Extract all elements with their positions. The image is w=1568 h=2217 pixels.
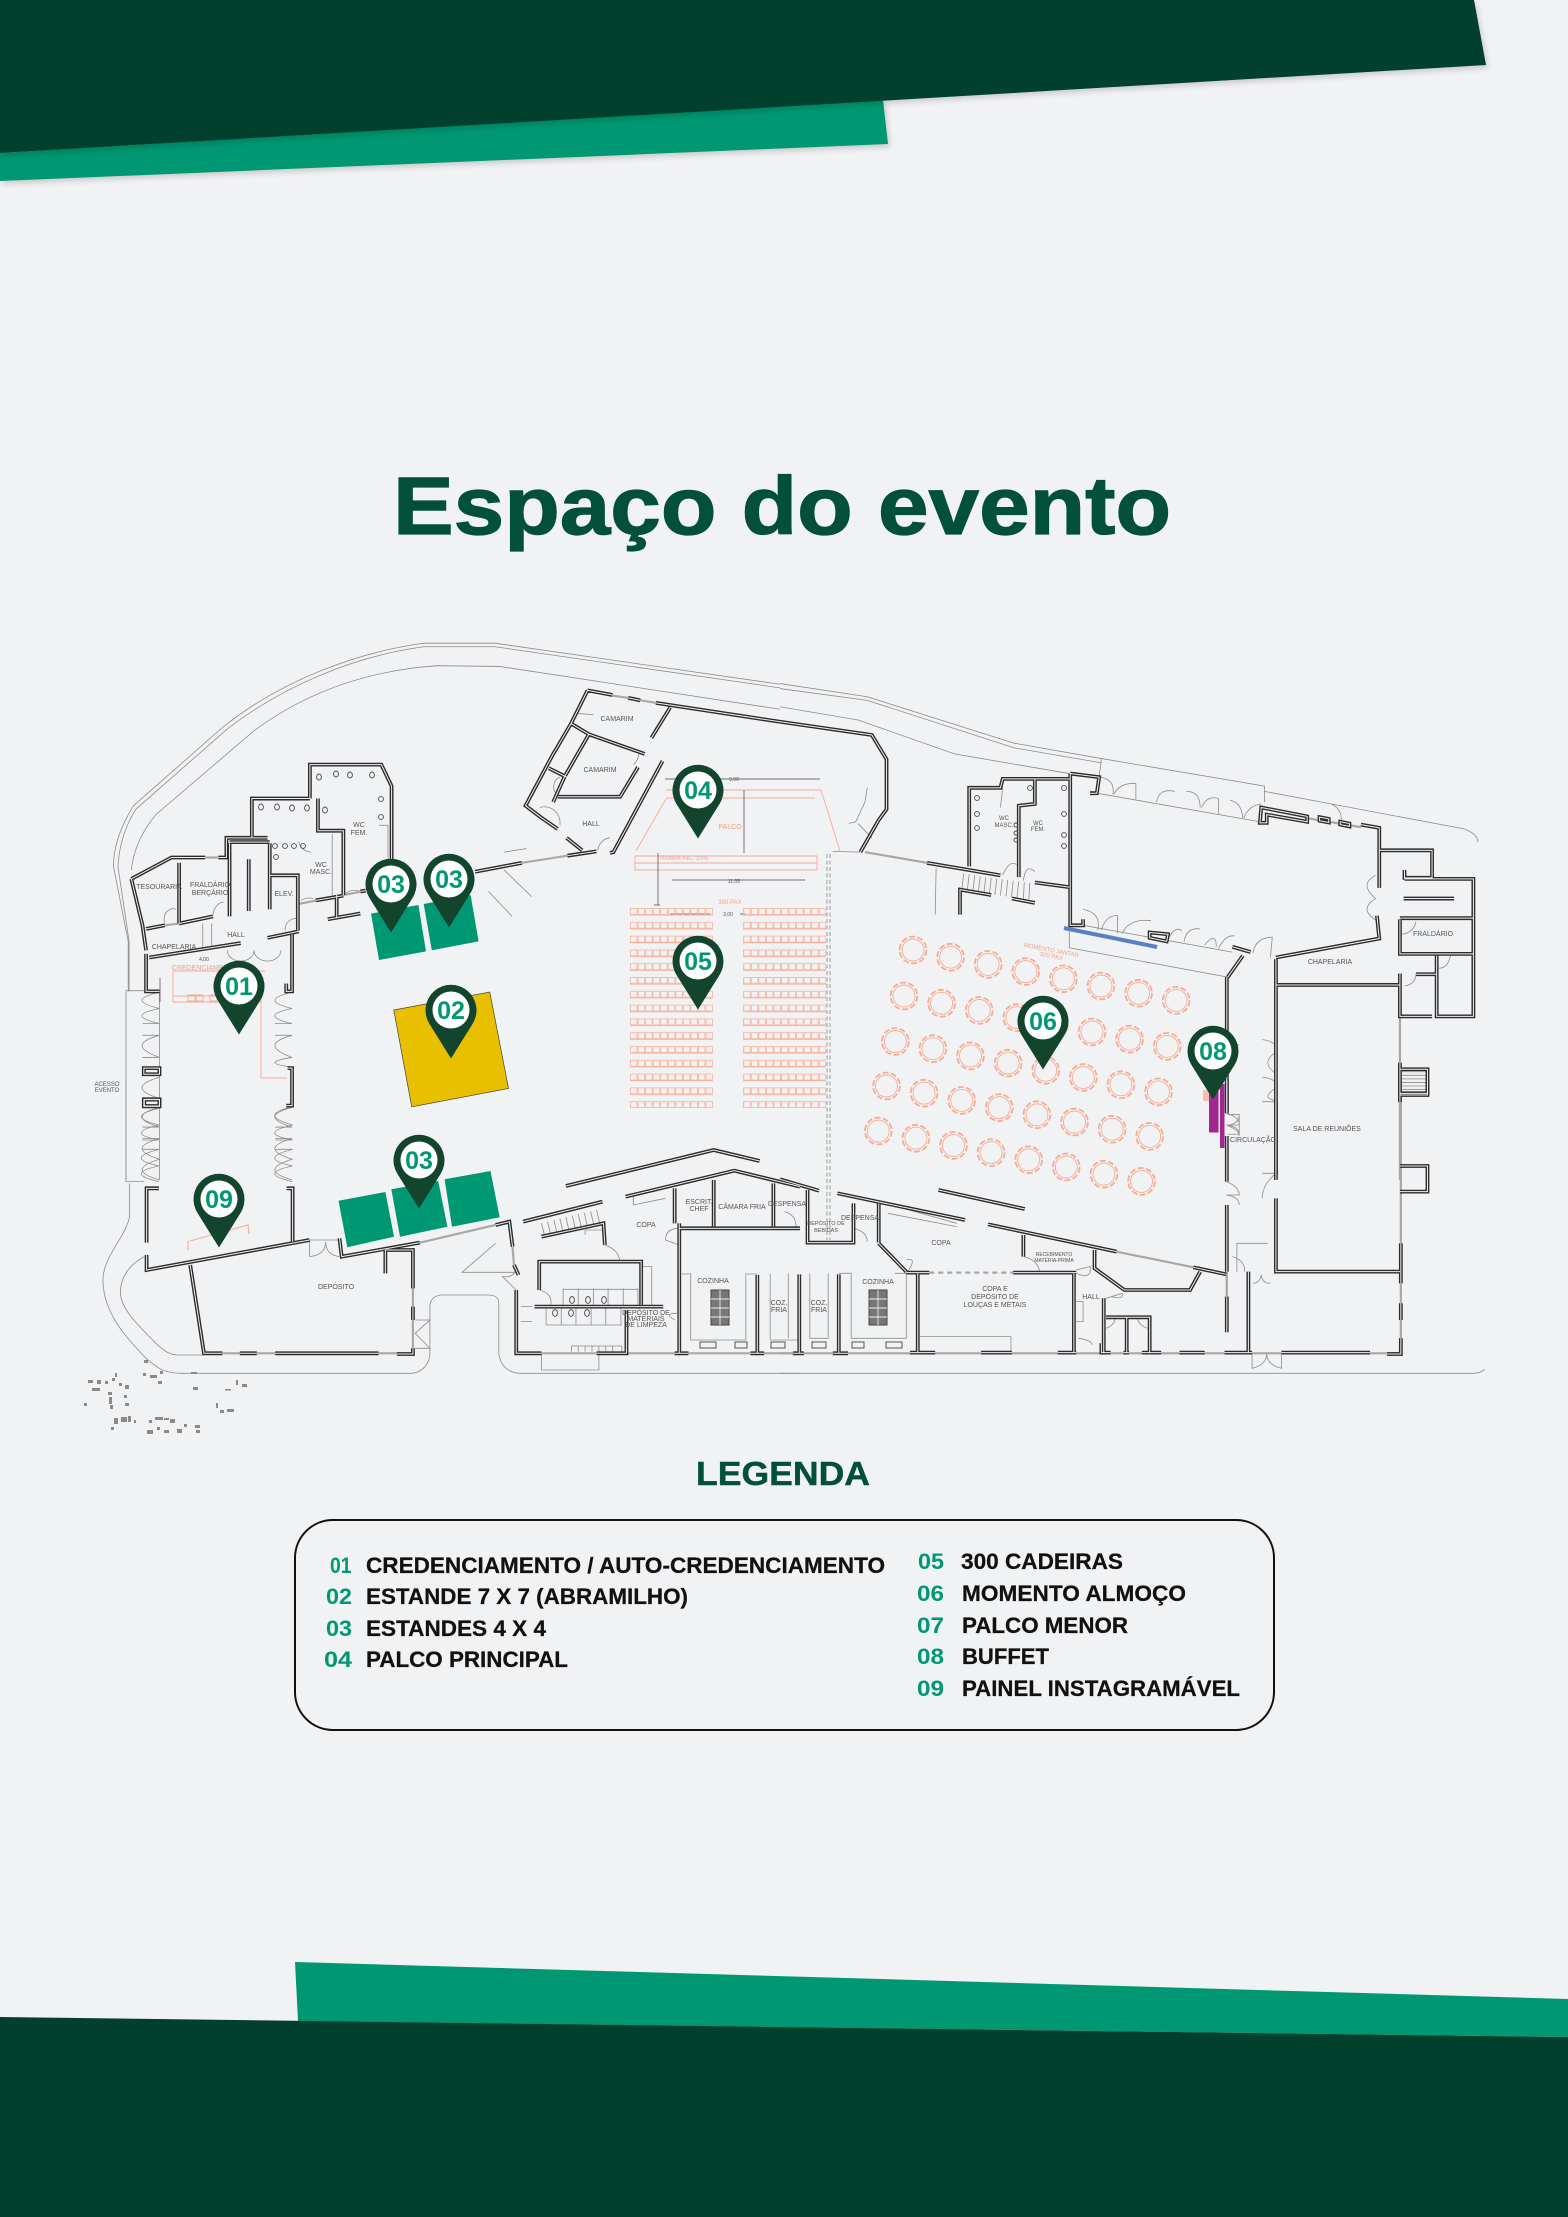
stands 4x4 top xyxy=(371,895,479,960)
legend left column: 01 xyxy=(330,1553,352,1578)
room labels: COZINHA xyxy=(697,1278,729,1285)
small fixtures xyxy=(259,771,1066,1348)
room labels: DEPÓSITO xyxy=(318,1282,355,1291)
pin 08 xyxy=(1188,1026,1238,1100)
room labels: DEPÓSITO DE xyxy=(971,1292,1019,1301)
room labels: WC xyxy=(1033,821,1044,827)
legend right column: 300 CADEIRAS xyxy=(961,1549,1123,1574)
dashed divider between auditorium and dining xyxy=(827,854,830,1240)
room labels: WC xyxy=(315,862,327,869)
pin 03 top right xyxy=(424,854,474,928)
room labels: 4,00 xyxy=(199,957,209,963)
room labels: COZINHA xyxy=(862,1279,894,1286)
room labels: COPA xyxy=(636,1222,656,1229)
site outlines and thin lines xyxy=(103,643,1485,1373)
room labels: ELEV. xyxy=(274,891,294,898)
legend heading: LEGENDA xyxy=(696,1455,870,1492)
room labels: BEBIDAS xyxy=(814,1228,838,1234)
stage markup xyxy=(173,790,840,1250)
top banner xyxy=(0,0,1486,181)
legend box xyxy=(295,1520,1274,1730)
pin 09: 09 xyxy=(205,1186,233,1214)
legend left column: ESTANDE 7 X 7 (ABRAMILHO) xyxy=(366,1584,688,1609)
pin 05 xyxy=(672,936,724,1010)
legend right column: PALCO MENOR xyxy=(962,1613,1128,1638)
pin 03 top left: 03 xyxy=(377,871,405,899)
room labels: COZ. xyxy=(771,1300,787,1307)
room labels: MATERIAIS xyxy=(627,1316,665,1323)
room labels: RAMPA INC. 10% xyxy=(660,856,709,862)
legend left column: 02 xyxy=(326,1584,352,1609)
room labels: WC xyxy=(353,822,365,829)
legend right column: 07 xyxy=(917,1613,944,1638)
room labels: CAMARIM xyxy=(583,767,617,774)
floor plan xyxy=(84,643,1485,1434)
room labels: CHAPELARIA xyxy=(152,944,196,951)
pin 03 bottom: 03 xyxy=(405,1147,433,1175)
pin 04: 04 xyxy=(684,777,712,805)
buffet tables xyxy=(1203,1084,1224,1148)
walls xyxy=(131,690,1473,1354)
stand 7x7 xyxy=(394,992,508,1107)
room labels: HALL xyxy=(227,932,245,939)
windows and glazing xyxy=(165,696,1401,1353)
room labels: DESPENSA xyxy=(768,1201,806,1208)
room labels: EVENTO xyxy=(95,1088,120,1094)
room labels: 300 PAX xyxy=(718,900,742,906)
room labels: 3,00 xyxy=(723,912,733,918)
room labels: ESCRIT. xyxy=(686,1199,712,1206)
room labels: SALA DE REUNIÕES xyxy=(1293,1124,1361,1133)
legend right column: 08 xyxy=(917,1644,944,1669)
room labels: CHEF xyxy=(689,1206,709,1213)
pin 02: 02 xyxy=(437,997,465,1025)
pin 02 xyxy=(426,985,476,1058)
pin 03 top left xyxy=(366,859,416,932)
room labels: CÂMARA FRIA xyxy=(718,1202,766,1211)
room labels: MOMENTO JANTAR xyxy=(1023,943,1080,959)
legend left column: ESTANDES 4 X 4 xyxy=(366,1616,547,1641)
legend right column xyxy=(917,1549,1240,1701)
legend left column: PALCO PRINCIPAL xyxy=(366,1647,568,1672)
pin 09 xyxy=(194,1174,244,1248)
room labels: COPA E xyxy=(982,1286,1008,1293)
title: Espaço do evento xyxy=(393,461,1171,552)
legend left column: 04 xyxy=(324,1647,353,1672)
room labels: DEPÓSITO DE xyxy=(807,1220,845,1227)
room labels: RECEBIMENTO xyxy=(1036,1252,1072,1258)
room labels: WC xyxy=(999,816,1010,822)
room labels: 9,00 xyxy=(729,777,739,783)
room labels: DEPÓSITO DE xyxy=(622,1308,670,1317)
legend right column: 09 xyxy=(917,1676,944,1701)
legend right column: 06 xyxy=(917,1581,944,1606)
room labels: CREDENCIAMENTO xyxy=(172,965,239,972)
room labels: PALCO xyxy=(718,824,742,831)
room labels: MATÉRIA-PRIMA xyxy=(1034,1257,1074,1264)
room labels: 11,05 xyxy=(728,879,740,885)
room labels xyxy=(94,716,1454,1329)
bottom banner xyxy=(0,1962,1568,2217)
pin 05: 05 xyxy=(684,948,712,976)
pin 03 top right: 03 xyxy=(435,866,463,894)
room labels: MASC. xyxy=(994,823,1014,829)
room labels: DE LIMPEZA xyxy=(625,1322,667,1329)
pin 06: 06 xyxy=(1029,1008,1057,1036)
room labels: FRALDÁRIO xyxy=(190,880,231,889)
dining tables xyxy=(865,937,1190,1195)
room labels: FEM. xyxy=(351,830,367,837)
trees and scattered vegetation xyxy=(84,1360,247,1434)
pin 08: 08 xyxy=(1199,1038,1227,1066)
small stage bar xyxy=(1064,928,1157,947)
legend right column: 05 xyxy=(918,1549,944,1574)
pin 06 xyxy=(1018,996,1068,1070)
room labels: TESOURARIA xyxy=(136,884,182,891)
room labels: MASC. xyxy=(310,869,332,876)
legend left column: 03 xyxy=(326,1616,352,1641)
room labels: COZ. xyxy=(811,1300,827,1307)
legend right column: PAINEL INSTAGRAMÁVEL xyxy=(962,1676,1240,1701)
pin 01 xyxy=(214,961,264,1034)
auditorium seating xyxy=(630,908,826,1108)
room labels: CHAPELARIA xyxy=(1308,959,1352,966)
room labels: FRALDÁRIO xyxy=(1413,929,1454,938)
room labels: LOUÇAS E METAIS xyxy=(964,1302,1027,1309)
pin 04 xyxy=(672,765,724,838)
room labels: HALL xyxy=(1082,1294,1100,1301)
room labels: FRIA xyxy=(811,1307,827,1314)
room labels: 320 PAX xyxy=(1039,952,1063,962)
legend left column xyxy=(324,1553,885,1672)
room labels: DESPENSA xyxy=(841,1215,879,1222)
room labels: COPA xyxy=(931,1240,951,1247)
room labels: FRIA xyxy=(771,1307,787,1314)
room labels: BERÇÁRIO xyxy=(192,888,229,897)
pin 01: 01 xyxy=(225,973,253,1001)
legend right column: BUFFET xyxy=(962,1644,1050,1669)
room labels: CAMARIM xyxy=(600,716,634,723)
room labels: FEM. xyxy=(1031,827,1045,833)
pin 03 bottom xyxy=(394,1135,444,1208)
room labels: HALL xyxy=(582,821,600,828)
room labels: CIRCULAÇÃO xyxy=(1230,1135,1276,1144)
legend left column: CREDENCIAMENTO / AUTO-CREDENCIAMENTO xyxy=(366,1553,885,1578)
room labels: ACESSO xyxy=(94,1082,120,1088)
legend right column: MOMENTO ALMOÇO xyxy=(962,1581,1186,1606)
stands 4x4 bottom xyxy=(338,1171,500,1247)
